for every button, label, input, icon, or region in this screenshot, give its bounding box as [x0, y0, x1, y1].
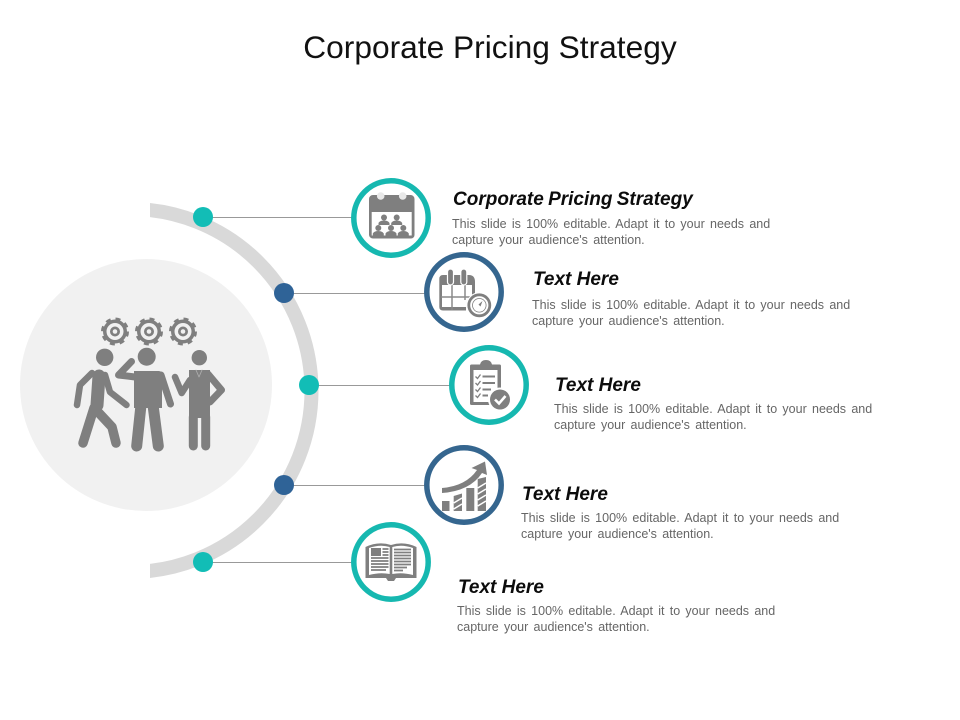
heading 5: Text Here [458, 576, 544, 598]
body 1: capture your audience's attention. [452, 233, 645, 247]
body 5: capture your audience's attention. [457, 620, 650, 634]
icon rings [354, 181, 526, 599]
body 5: This slide is 100% editable. Adapt it to your needs and [457, 604, 775, 618]
text block 1 [452, 188, 770, 247]
icon: open book [366, 543, 416, 581]
body 1 [452, 217, 770, 247]
heading 4: Text Here [522, 484, 608, 504]
connector lines [203, 218, 452, 562]
body 3 [554, 402, 872, 432]
body 4 [521, 511, 839, 541]
text block 5 [457, 576, 775, 634]
icon: clipboard checklist [470, 360, 512, 412]
body 4: capture your audience's attention. [521, 527, 714, 541]
title: Corporate Pricing Strategy [303, 29, 677, 65]
body 1: This slide is 100% editable. Adapt it to your needs and [452, 217, 770, 231]
person walking [77, 349, 126, 443]
heading 2: Text Here [533, 268, 619, 290]
text block 2 [532, 268, 850, 328]
icon: calendar with gauge [439, 269, 492, 318]
heading 1: Corporate Pricing Strategy [453, 188, 693, 210]
icon: team with gears [77, 319, 222, 446]
text block 3 [554, 374, 872, 432]
body 2 [532, 298, 850, 328]
body 4: This slide is 100% editable. Adapt it to your needs and [521, 511, 839, 525]
body 2: capture your audience's attention. [532, 314, 725, 328]
body 3: capture your audience's attention. [554, 418, 747, 432]
text block 4 [521, 484, 839, 541]
central circle [20, 259, 272, 511]
gears [102, 319, 196, 344]
person in suit [175, 350, 222, 446]
body 2: This slide is 100% editable. Adapt it to your needs and [532, 298, 850, 312]
icon: growth chart [442, 462, 487, 511]
curved arc [130, 209, 312, 572]
person centre [118, 348, 170, 446]
heading 3: Text Here [555, 374, 641, 396]
node dots [193, 207, 319, 572]
body 3: This slide is 100% editable. Adapt it to your needs and [554, 402, 872, 416]
icon: calendar with people [369, 192, 414, 239]
body 5 [457, 604, 775, 634]
diagram [20, 178, 529, 602]
